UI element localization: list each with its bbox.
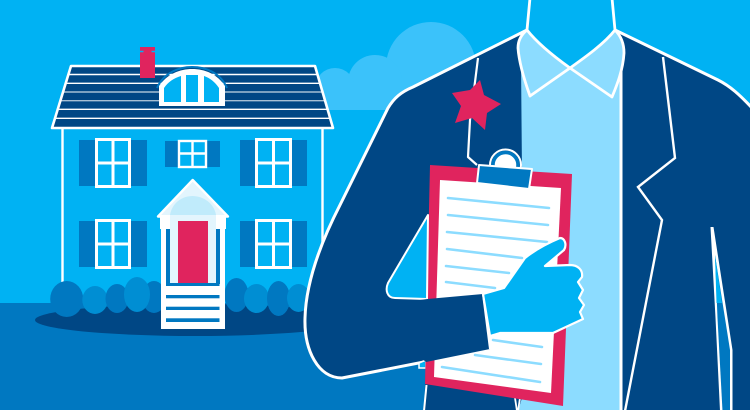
clipboard board <box>425 165 572 406</box>
porch roof <box>158 180 228 216</box>
jacket body <box>305 30 750 410</box>
lower right window with shutters <box>240 220 307 268</box>
lower left window with shutters <box>79 220 147 268</box>
clipboard <box>425 150 572 406</box>
porch and door <box>158 180 228 329</box>
porch column frame and steps <box>161 217 225 329</box>
neck <box>527 0 615 68</box>
collar <box>518 30 624 97</box>
porch surround <box>170 215 216 283</box>
small cuff under arm <box>419 360 426 368</box>
bushes <box>50 277 310 317</box>
left lapel line <box>468 58 478 165</box>
door <box>178 221 208 283</box>
forearm <box>400 294 490 362</box>
house <box>50 47 333 329</box>
cuff edge <box>483 294 490 349</box>
upper centre window with shutters <box>165 141 220 167</box>
cloud <box>315 22 476 112</box>
clip ring <box>493 152 518 178</box>
jacket vent <box>710 227 732 410</box>
star badge <box>452 80 501 130</box>
upper right window with shutters <box>240 139 307 187</box>
shirt <box>518 50 621 410</box>
jacket outline <box>305 30 750 378</box>
roof <box>52 66 333 128</box>
upper left window with shutters <box>79 139 147 187</box>
steps <box>166 283 220 322</box>
paper lines <box>442 198 549 382</box>
arm triangle gap <box>387 215 428 299</box>
inspector figure <box>305 0 750 410</box>
clipboard paper <box>434 180 561 393</box>
house walls <box>62 128 322 300</box>
right lapel line <box>625 57 675 410</box>
ground shadow <box>35 304 355 336</box>
dormer window <box>157 67 227 106</box>
hand <box>483 238 584 336</box>
chimney <box>140 47 155 78</box>
clip base <box>477 165 532 189</box>
ground <box>0 303 750 410</box>
